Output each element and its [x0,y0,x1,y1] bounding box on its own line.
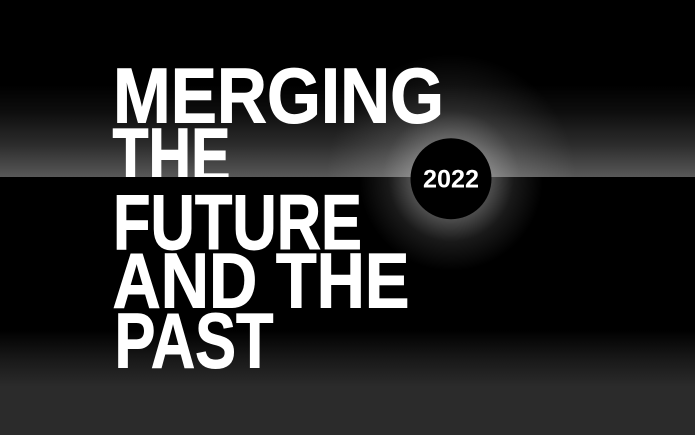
title [112,68,440,369]
title: AND THE [112,236,410,324]
year badge: 2022 [423,166,479,194]
title: MERGING [113,52,444,140]
title: PAST [114,296,274,384]
year badge [410,138,492,219]
title: THE [112,112,230,200]
title: FUTURE [113,178,362,266]
